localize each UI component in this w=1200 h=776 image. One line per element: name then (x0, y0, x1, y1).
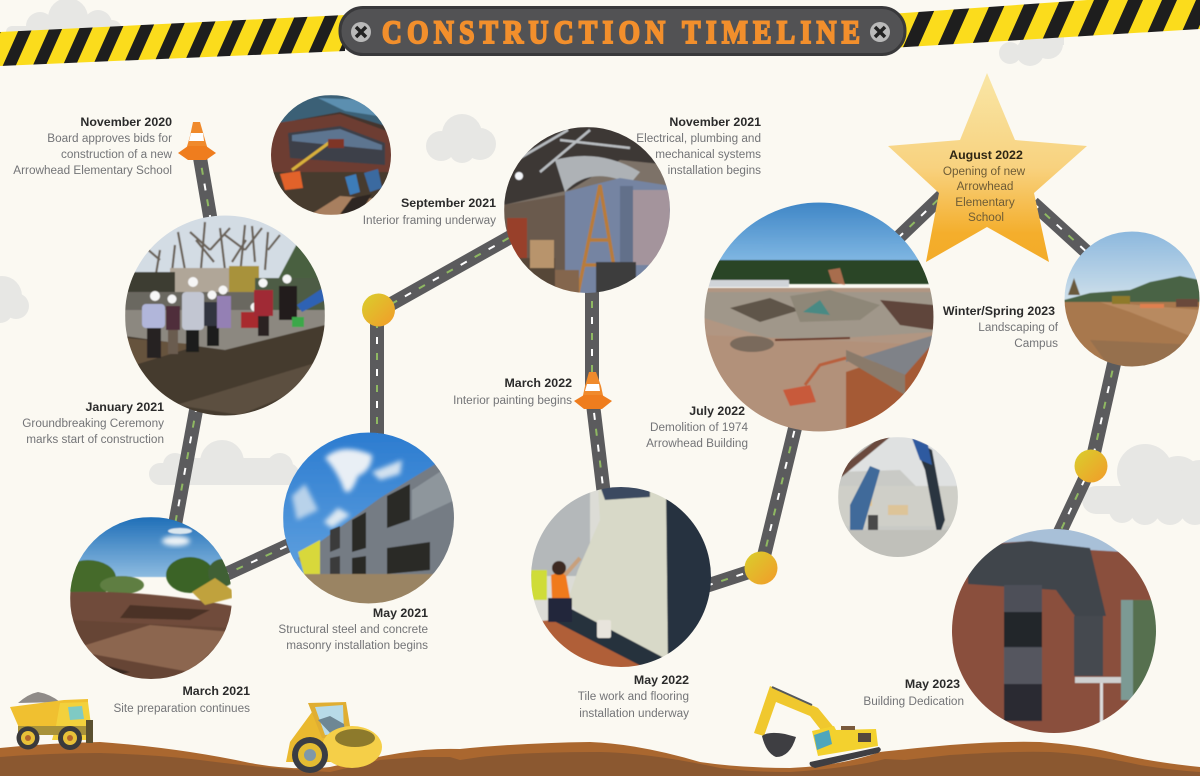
label: May 2021 (278, 606, 428, 652)
cloud: left edge (0, 276, 29, 323)
label: November 2020: Board approves bids for (47, 132, 172, 145)
node: road junction 1 (362, 294, 395, 326)
label: March 2022 (453, 376, 572, 407)
road network (174, 152, 1116, 586)
people (142, 274, 304, 358)
photo: groundbreaking ceremony (125, 215, 325, 420)
label: May 2022 (578, 673, 689, 720)
label: May 2023: May 2023 (905, 677, 960, 691)
label: Winter/Spring 2023 (943, 304, 1059, 350)
label: January 2021: marks start of construction (26, 433, 164, 446)
icon: traffic cone top (178, 122, 216, 160)
label: November 2021 (636, 115, 761, 177)
photo: landscaping (1064, 231, 1200, 368)
label: March 2021: March 2021 (182, 684, 250, 698)
label: March 2021 (113, 684, 250, 715)
text: opening: Elementary (955, 196, 1015, 209)
label: January 2021: Groundbreaking Ceremony (22, 417, 164, 430)
heading: August 2022: August 2022 (949, 148, 1023, 162)
star: August 2022 (888, 73, 1087, 262)
label: September 2021 (363, 196, 496, 227)
label: May 2023 (863, 677, 964, 708)
node: road junction 2 (744, 552, 778, 584)
photo: lift at building (270, 95, 392, 215)
photo: site preparation (60, 517, 236, 680)
label: November 2021: installation begins (668, 164, 761, 177)
cloud: right (1082, 444, 1200, 525)
title: CONSTRUCTION TIMELINE (382, 14, 860, 51)
cloud: below tape (999, 25, 1064, 66)
photo: structural steel (283, 432, 455, 604)
label: March 2022: March 2022 (504, 376, 572, 390)
label: September 2021: September 2021 (401, 196, 496, 210)
text: opening: Arrowhead (957, 180, 1013, 193)
photo: demolition (704, 202, 934, 432)
label: January 2021: January 2021 (85, 400, 164, 414)
node: road junction 3 (1074, 450, 1108, 482)
hazard tape right (890, 0, 1200, 48)
cloud: middle left (149, 440, 299, 485)
label: November 2020: Arrowhead Elementary School (13, 164, 172, 177)
photo: interior lifts (838, 437, 959, 558)
photo: finished building (951, 528, 1157, 734)
label: November 2020 (13, 115, 173, 177)
photo: tile work (530, 486, 712, 668)
icon: road roller (286, 702, 382, 773)
label: July 2022: Arrowhead Building (646, 437, 748, 450)
label: Winter/Spring 2023: Landscaping of (978, 321, 1059, 334)
label: July 2022: July 2022 (689, 404, 745, 418)
cloud: centre top (426, 114, 496, 163)
label: Winter/Spring 2023: Campus (1014, 337, 1058, 350)
label: November 2020: construction of a new (61, 148, 173, 161)
label: November 2020: November 2020 (80, 115, 172, 129)
label: March 2022: Interior painting begins (453, 394, 572, 407)
label: May 2022: May 2022 (634, 673, 689, 687)
icon: right bolt (870, 22, 890, 42)
label: November 2021: November 2021 (669, 115, 761, 129)
label: March 2021: Site preparation continues (113, 702, 250, 715)
text: opening (943, 165, 1026, 224)
label: May 2021: May 2021 (373, 606, 428, 620)
label: Winter/Spring 2023: Winter/Spring 2023 (943, 304, 1055, 318)
label: July 2022 (646, 404, 748, 450)
label: September 2021: Interior framing underway (363, 214, 496, 227)
label: January 2021 (22, 400, 164, 446)
label: July 2022: Demolition of 1974 (650, 421, 748, 434)
icon: traffic cone middle (574, 372, 612, 409)
label: May 2021: Structural steel and concrete (278, 623, 428, 636)
label: November 2021: Electrical, plumbing and (636, 132, 761, 145)
icon: dump truck (10, 692, 93, 750)
cloud: top left behind tape (6, 0, 126, 40)
text: opening: Opening of new (943, 165, 1026, 178)
label: May 2023: Building Dedication (863, 695, 964, 708)
ground (0, 742, 1200, 776)
label: May 2022: Tile work and flooring (578, 690, 689, 703)
photo: interior framing (504, 127, 671, 295)
title plate (340, 8, 905, 54)
label: November 2021: mechanical systems (655, 148, 761, 161)
label: May 2022: installation underway (579, 707, 689, 720)
text: opening: School (968, 211, 1004, 224)
icon: excavator (754, 686, 881, 768)
hazard tape left (0, 15, 345, 66)
icon: left bolt (351, 22, 371, 42)
label: May 2021: masonry installation begins (286, 639, 428, 652)
